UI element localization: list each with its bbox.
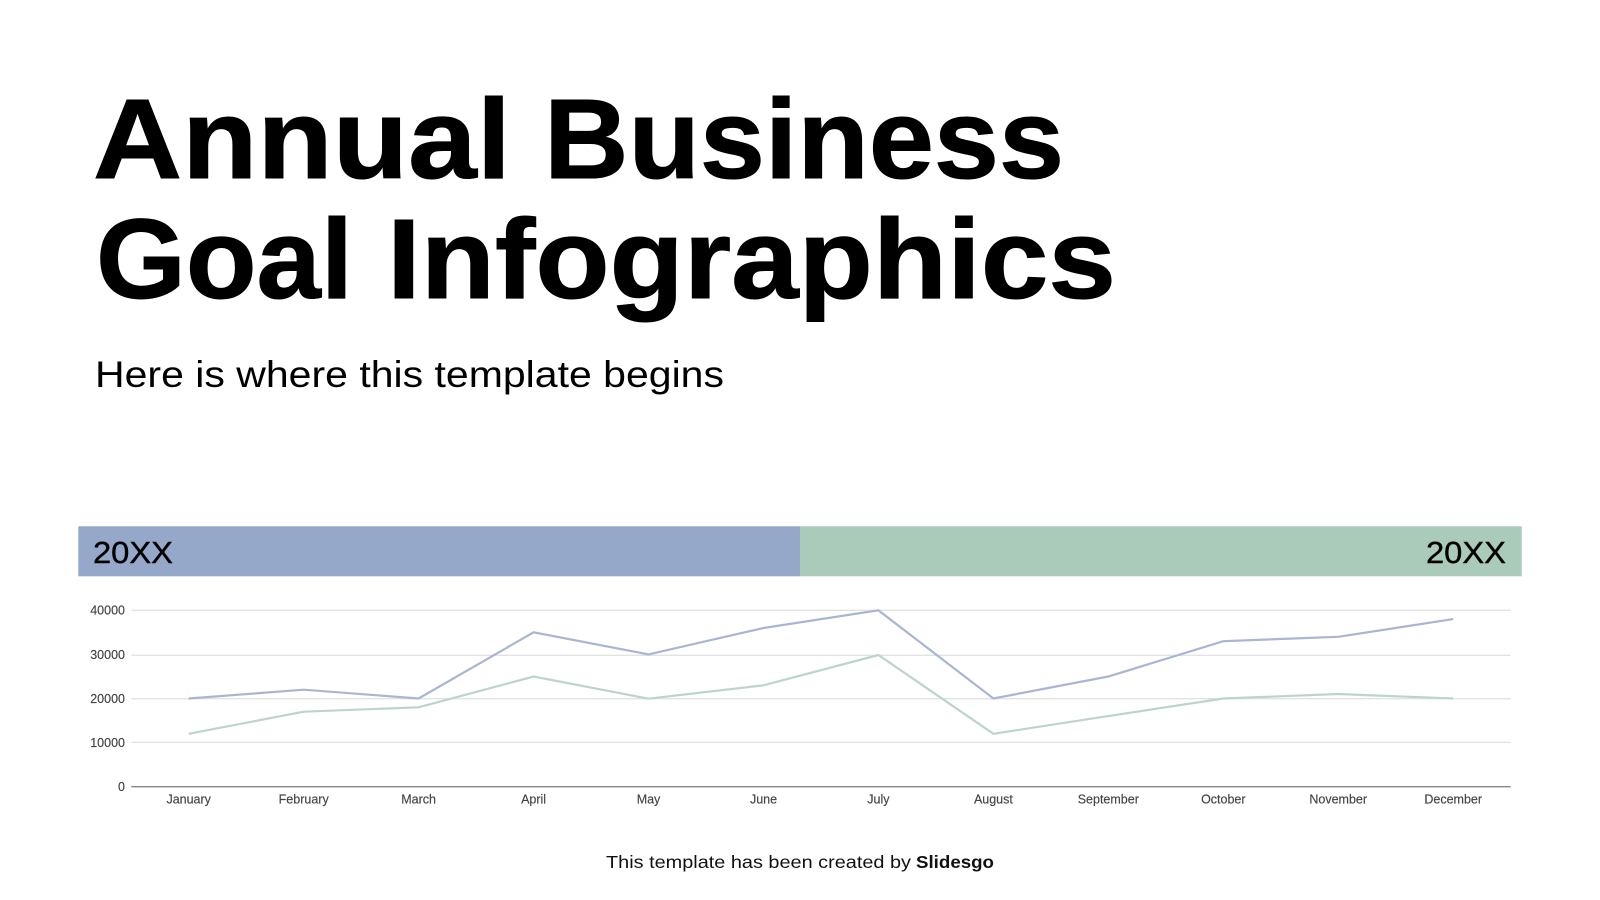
series: blue line xyxy=(189,610,1453,698)
title: Business xyxy=(544,76,1064,202)
series: green line xyxy=(189,655,1453,734)
x-axis labels: November xyxy=(1309,792,1367,806)
y-axis labels: 20000 xyxy=(90,692,125,706)
line chart xyxy=(90,604,1511,806)
x-axis labels: December xyxy=(1424,792,1482,806)
x-axis labels: July xyxy=(867,792,890,806)
x-axis labels xyxy=(166,792,1482,806)
x-axis labels: March xyxy=(401,792,436,806)
x-axis labels: May xyxy=(637,792,661,806)
footer credit: Slidesgo xyxy=(916,852,994,872)
x-axis labels: June xyxy=(750,792,777,806)
x-axis labels: September xyxy=(1078,792,1139,806)
blue year segment xyxy=(78,526,800,576)
x-axis labels: January xyxy=(166,792,212,806)
panel: year bar xyxy=(78,526,1522,576)
title: Goal xyxy=(96,196,353,322)
x-axis labels: October xyxy=(1201,792,1246,806)
title: Infographics xyxy=(387,196,1116,322)
subtitle: Here is where this template begins xyxy=(95,354,724,395)
y-axis labels: 10000 xyxy=(90,736,125,750)
y-axis labels xyxy=(90,604,125,794)
y-axis labels: 40000 xyxy=(90,604,125,618)
green year segment: 20XX xyxy=(1426,535,1506,570)
footer credit xyxy=(606,852,994,872)
y-axis labels: 0 xyxy=(118,780,125,794)
title xyxy=(93,76,1116,322)
blue year segment: 20XX xyxy=(93,535,173,570)
green year segment xyxy=(800,526,1522,576)
y-axis labels: 30000 xyxy=(90,648,125,662)
x-axis labels: February xyxy=(279,792,329,806)
title: Annual xyxy=(93,76,511,202)
x-axis labels: April xyxy=(521,792,546,806)
footer credit: This template has been created by xyxy=(606,852,911,872)
x-axis labels: August xyxy=(974,792,1013,806)
